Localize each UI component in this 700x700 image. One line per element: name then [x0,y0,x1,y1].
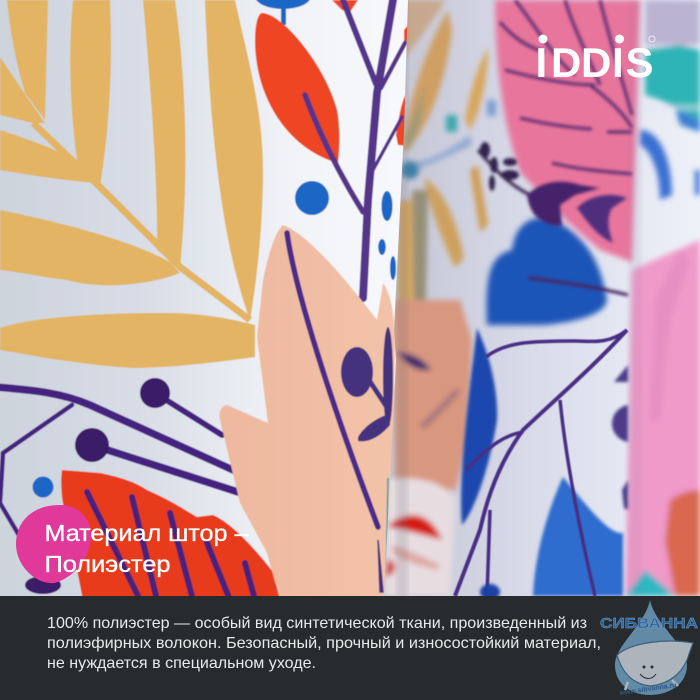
pink leaf top [495,0,640,262]
watermark name: СИБВАННА [600,615,698,632]
red lower leaf [61,470,290,600]
body text: полиэфирных волокон. Безопасный, прочный и износостойкий материал, [47,635,601,652]
logo: iddis: IDDIS [536,39,654,86]
red and white blurred leaf [385,478,455,596]
heading: Полиэстер [44,551,170,577]
heading: Материал штор – [44,520,249,546]
dark blurred strokes [397,352,458,427]
bottom dark band [0,596,700,700]
dark purple blurred veins and sprigs [478,0,632,600]
body text [47,615,601,672]
teal edge line [386,478,388,596]
tan blurred leaves [398,0,496,300]
body text: не нуждается в специальном уходе. [47,655,316,672]
pink accent circle [16,505,91,583]
blue top flower [255,0,311,25]
red fragments at edge [332,0,408,146]
peach leaf sprig [341,327,393,592]
purple branches [305,0,405,298]
pink far right leaf [625,240,700,596]
leaf stripes [87,492,285,600]
red top leaf [255,13,339,163]
peach leaf purple vein [287,233,378,527]
blue dots [32,181,396,498]
tan palm fronds [0,0,263,368]
panel: sharp foreground curtain [0,0,415,605]
water drop [615,600,687,695]
blue lower leaf [533,477,623,596]
teal and lavender far fold [640,0,700,200]
purple blurred branches [455,330,627,596]
heading [44,520,249,577]
panel: blurred background curtain folds [380,0,700,600]
watermark url: www.sibvanna.ru [618,682,677,697]
blue central leaf [461,328,497,525]
dark purple branches lower left [0,387,238,537]
fold shadows [396,0,642,596]
watermark: sibvanna [600,600,698,697]
peach blurred leaf [393,300,472,490]
peach leaf [219,225,395,600]
dark purple berries [25,378,170,594]
blue flower [487,217,607,325]
dark sprig leaves [480,142,519,191]
bathtub mascot [617,641,693,690]
body text: 100% полиэстер — особый вид синтетической ткани, произведенный из [47,615,587,632]
